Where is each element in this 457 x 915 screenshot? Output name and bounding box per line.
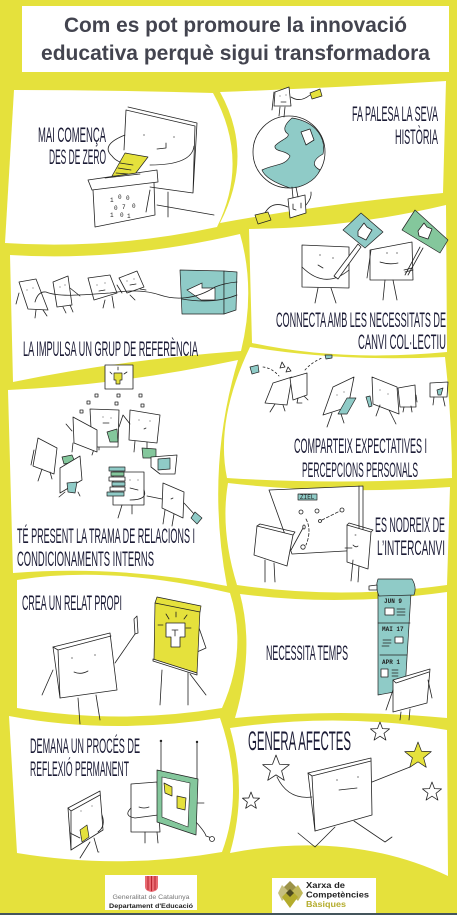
panel: necessita temps	[235, 579, 447, 720]
panel: mai comença des de zero: 0	[114, 205, 118, 212]
panel: connecta amb les necessitats de canvi col·lectiu	[249, 205, 448, 355]
panel: necessita temps: MAI 17	[382, 626, 404, 633]
panel: mai comença des de zero: 7	[122, 204, 126, 211]
panel: la impulsa un grup de referència: LA IMPULSA UN GRUP DE REFERÈNCIA	[23, 338, 198, 361]
panel: crea un relat propi	[17, 575, 237, 724]
panel: comparteix expectatives i percepcions personals	[224, 347, 452, 482]
panel: té present la trama de relacions i condicionaments interns	[8, 360, 238, 586]
title	[22, 6, 449, 72]
panel: demana un procés de reflexió permanent: REFLEXIÓ PERMANENT	[30, 758, 129, 781]
panel: necessita temps: APR 1	[382, 659, 400, 666]
panel: té present la trama de relacions i condicionaments interns: TÉ PRESENT LA TRAMA DE RELACIONS I	[17, 525, 195, 548]
logo: Xarxa de Competències Bàsiques: Xarxa de	[306, 881, 346, 890]
logo: Generalitat de Catalunya: Departament d'Educació	[109, 903, 193, 910]
logo: Generalitat de Catalunya	[105, 875, 197, 910]
title: Com es pot promoure la innovació	[64, 14, 407, 37]
logo: Xarxa de Competències Bàsiques: Competències	[306, 890, 370, 900]
panel: mai comença des de zero: 0	[118, 194, 122, 201]
panel: la impulsa un grup de referència	[10, 234, 248, 382]
logo: Xarxa de Competències Bàsiques: Bàsiques	[306, 900, 347, 909]
panel: es nodreix de l'intercanvi	[225, 483, 450, 592]
panel: mai comença des de zero	[5, 90, 233, 245]
panel: necessita temps: JUN 9	[384, 598, 402, 605]
panel: mai comença des de zero: DES DE ZERO	[49, 146, 106, 169]
panel: genera afectes	[230, 720, 448, 876]
panel: necessita temps: NECESSITA TEMPS	[266, 642, 348, 665]
panel: demana un procés de reflexió permanent: DEMANA UN PROCÉS DE	[30, 735, 140, 758]
panel: mai comença des de zero: 1	[110, 197, 114, 204]
logo: Xarxa de Competències Bàsiques	[272, 878, 376, 913]
title: educativa perquè sigui transformadora	[41, 42, 430, 65]
panel: mai comença des de zero: 1	[110, 212, 114, 219]
panel: mai comença des de zero: 0	[120, 212, 124, 219]
panel: mai comença des de zero: 0	[126, 195, 130, 202]
panel: mai comença des de zero: 0	[132, 203, 136, 210]
panel: mai comença des de zero: MAI COMENÇA	[38, 124, 106, 147]
panel: es nodreix de l'intercanvi: ZIEL	[300, 494, 315, 501]
panel: té present la trama de relacions i condicionaments interns: CONDICIONAMENTS INTERNS	[17, 548, 154, 571]
panel: crea un relat propi: CREA UN RELAT PROPI	[22, 592, 122, 615]
panel: fa palesa la seva història	[220, 81, 446, 224]
logo: Generalitat de Catalunya: Generalitat de Catalunya	[112, 894, 190, 901]
panel: mai comença des de zero: 1	[127, 213, 131, 220]
panel: demana un procés de reflexió permanent	[9, 716, 233, 861]
